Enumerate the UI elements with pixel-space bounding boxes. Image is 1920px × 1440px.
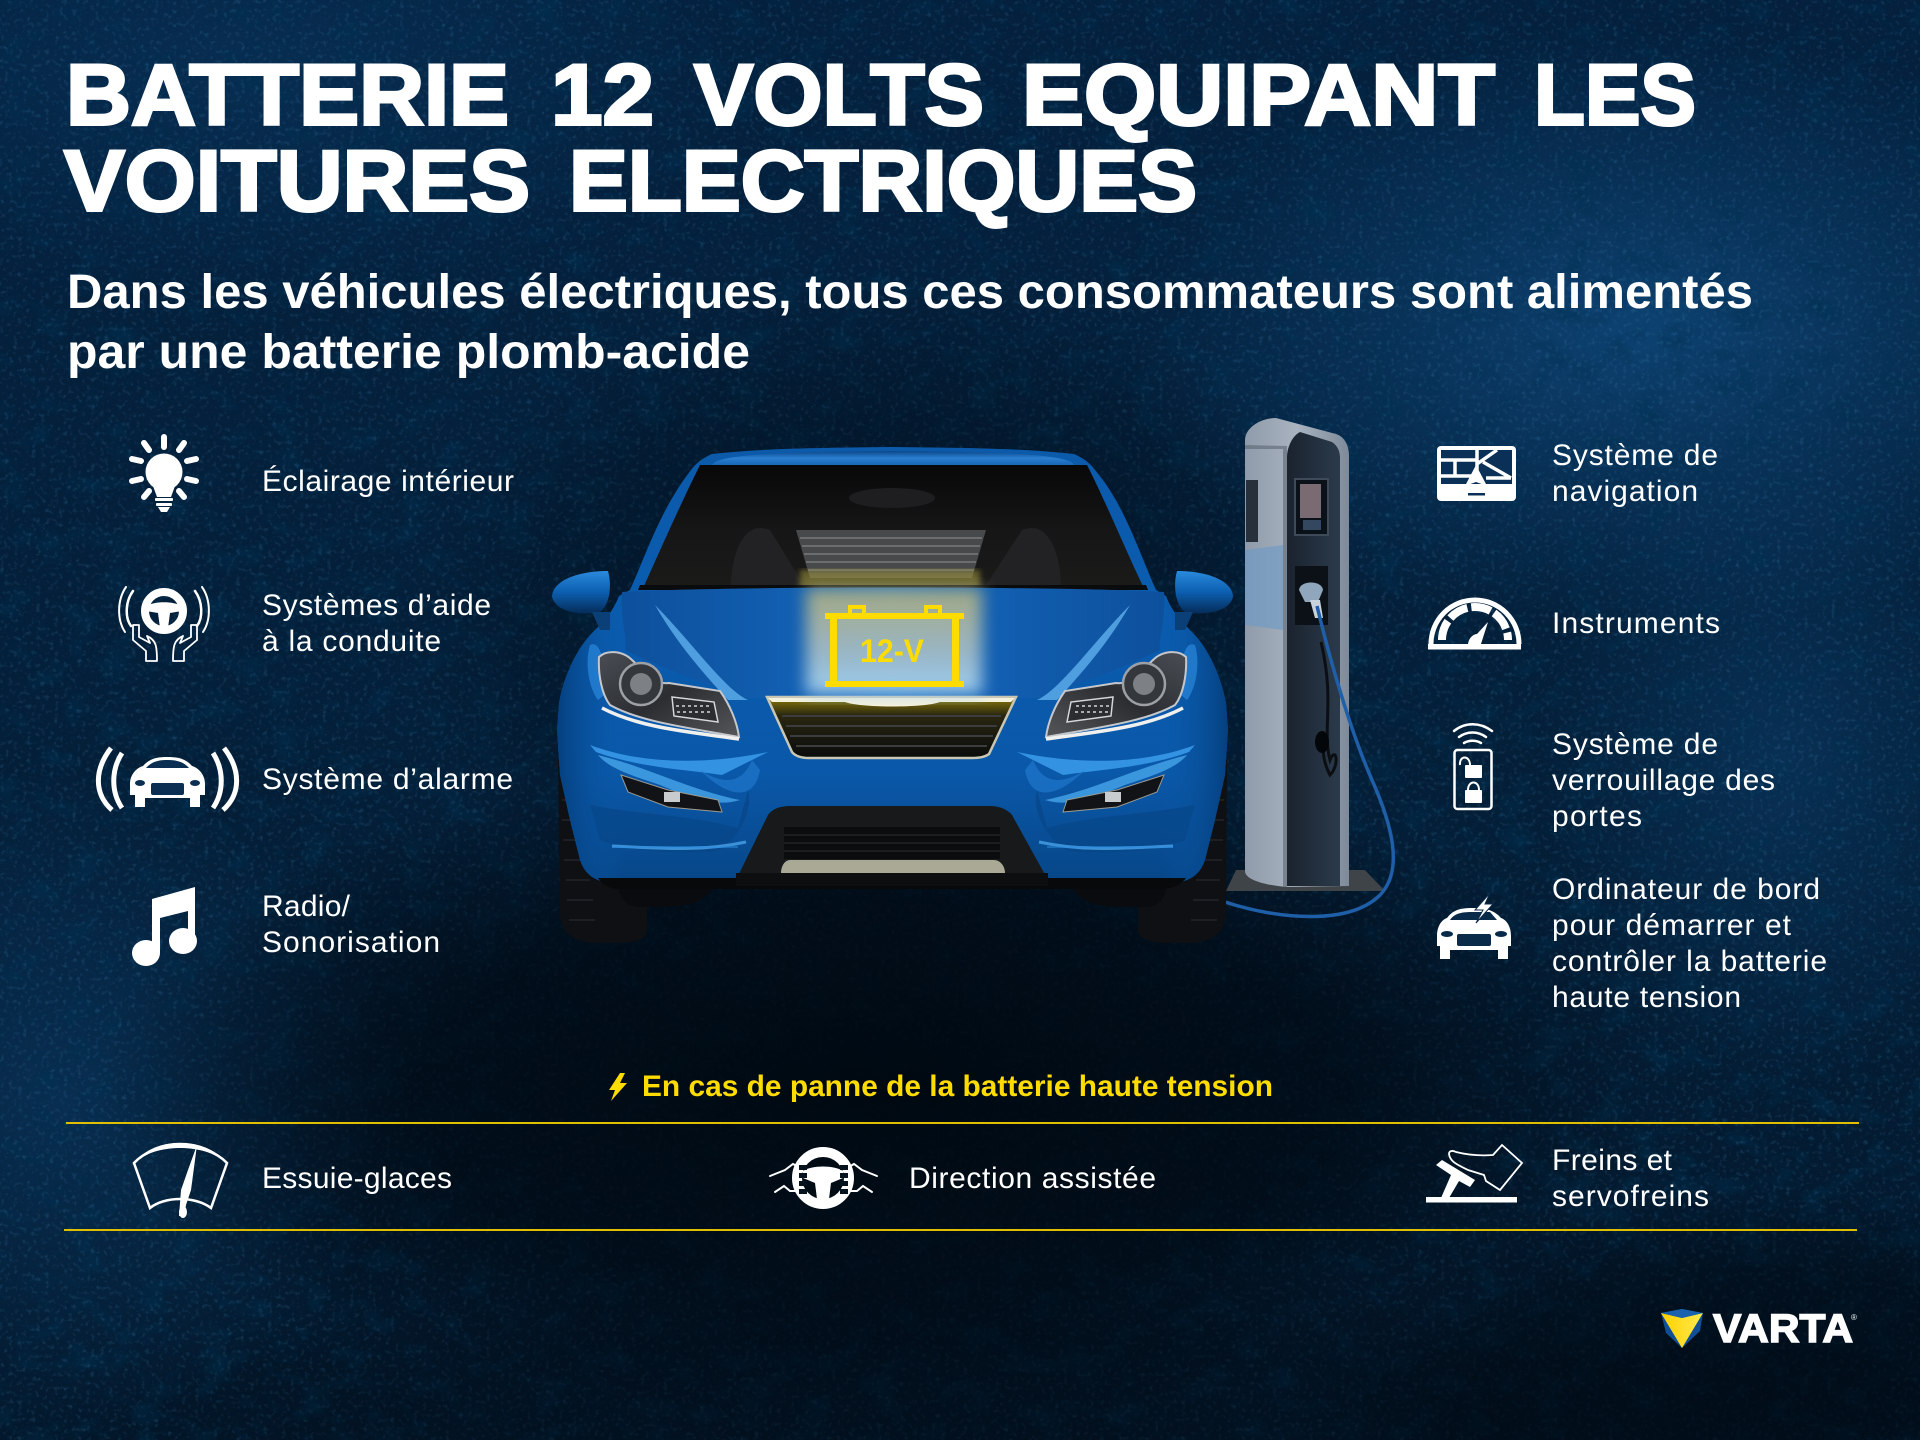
icon: yellow lightning bolt (609, 1073, 627, 1101)
grille (767, 697, 1016, 758)
icon: steering wheel with hands (119, 587, 209, 661)
label: haute tension (1552, 981, 1741, 1014)
station body (1245, 418, 1349, 887)
item: Ordinateur de bord (1437, 873, 1827, 1014)
label (262, 890, 440, 959)
tyres (558, 760, 1227, 943)
section heading: high voltage breakdown (609, 1070, 1273, 1103)
battery icon 12-V: 12-V (860, 633, 925, 669)
subtitle: Dans les véhicules électriques, tous ces consommateurs sont alimentés (67, 266, 1753, 319)
title: VOITURES (64, 134, 530, 230)
subtitle: par une batterie plomb-acide (67, 326, 750, 379)
charging station (1225, 418, 1393, 917)
label: Éclairage intérieur (262, 465, 514, 498)
left and right car details (552, 571, 1233, 907)
battery icon 12-V (825, 605, 964, 687)
logo wordmark: VARTA (1713, 1307, 1853, 1351)
label (1552, 439, 1718, 508)
label: Systèmes d’aide (262, 589, 491, 622)
heading text: En cas de panne de la batterie haute tension (642, 1070, 1273, 1103)
icon: car with alarm waves (98, 748, 237, 810)
label: Direction assistée (909, 1162, 1156, 1195)
title: LES (1534, 48, 1696, 144)
icon: speedometer gauge (1428, 600, 1521, 650)
label: Freins et (1552, 1144, 1673, 1177)
roof (712, 451, 1074, 465)
item: Système de navigation (1437, 439, 1718, 508)
label: Instruments (1552, 607, 1720, 640)
lower bumper (598, 806, 1186, 889)
title: EQUIPANT (1022, 48, 1495, 144)
logo shield (1661, 1309, 1703, 1348)
label (262, 589, 491, 658)
title: VOLTS (694, 48, 984, 144)
label: Ordinateur de bord (1552, 873, 1820, 906)
label (1552, 873, 1827, 1014)
label: à la conduite (262, 625, 441, 658)
windshield (644, 465, 1143, 586)
station holster (1295, 566, 1328, 625)
label: Système de (1552, 439, 1718, 472)
icon: windscreen wiper (134, 1143, 227, 1218)
label: servofreins (1552, 1180, 1709, 1213)
title: 12 (551, 48, 654, 144)
item: Freins et servofreins (1426, 1144, 1709, 1213)
label: contrôler la batterie (1552, 945, 1827, 978)
icon: music note (132, 887, 197, 966)
title: BATTERIE (66, 48, 509, 144)
item: Radio / Sonorisation (132, 887, 440, 966)
title: ELECTRIQUES (569, 134, 1197, 230)
car (552, 447, 1233, 943)
battery glow (806, 588, 982, 694)
label (1552, 728, 1775, 833)
body side shading (557, 447, 1228, 882)
label: navigation (1552, 475, 1698, 508)
divider top (66, 1122, 1859, 1124)
label: Système de (1552, 728, 1718, 761)
label: Radio/ (262, 890, 351, 923)
item: Instruments (1428, 600, 1720, 650)
label: pour démarrer et (1552, 909, 1792, 942)
subtitle (67, 266, 1753, 379)
item: Direction assistée (770, 1152, 1156, 1204)
station cable (1225, 606, 1393, 917)
icon: car with lightning bolt (1437, 893, 1511, 959)
divider bottom (64, 1229, 1857, 1231)
windshield interior (638, 488, 1148, 590)
item: Systèmes d'aide à la conduite (119, 587, 491, 661)
logo: VARTA: ® (1851, 1313, 1857, 1322)
label: Système d’alarme (262, 763, 513, 796)
item: Système de verrouillage des portes (1454, 724, 1775, 833)
label: portes (1552, 800, 1642, 833)
label: verrouillage des (1552, 764, 1775, 797)
station base (1226, 870, 1385, 891)
item: Éclairage intérieur (132, 437, 514, 512)
label (1552, 1144, 1709, 1213)
hood (622, 588, 1164, 698)
car body (557, 447, 1228, 882)
icon: brake pedal and foot (1426, 1145, 1522, 1202)
logo: VARTA (1661, 1307, 1857, 1351)
item: Essuie-glaces (134, 1143, 452, 1218)
station screen (1295, 479, 1328, 535)
item: Système d'alarme (98, 748, 513, 810)
icon: remote door lock (1454, 724, 1492, 809)
icon: light bulb (132, 437, 196, 512)
icon: navigation screen (1437, 446, 1516, 501)
label: Sonorisation (262, 926, 440, 959)
icon: hands on steering wheel (770, 1152, 877, 1204)
label: Essuie-glaces (262, 1162, 452, 1195)
title (64, 48, 1696, 230)
